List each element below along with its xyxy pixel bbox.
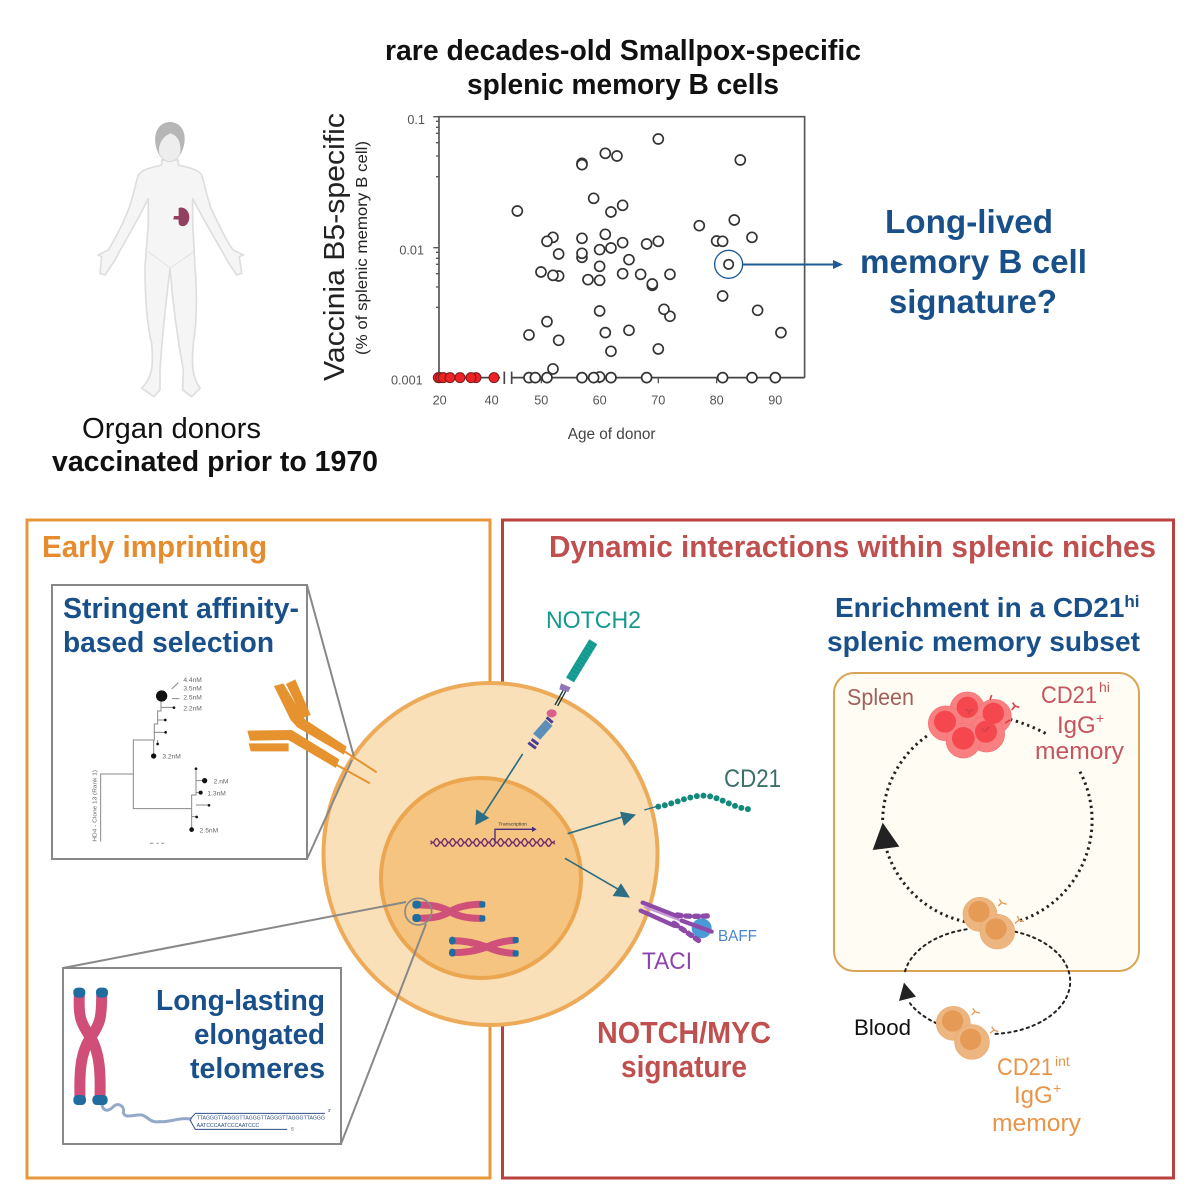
labels: spleen cycle xyxy=(847,679,1124,1137)
icon: NOTCH2 receptor, transcription and arrows: Transcription xyxy=(498,821,527,827)
phylogenetic tree xyxy=(93,677,228,843)
scatter chart: B5-specific cells vs age: 80 xyxy=(710,393,724,407)
heading: NOTCH/MYC signature xyxy=(597,1015,771,1084)
phylogenetic tree: 2.2nM xyxy=(183,706,202,713)
heading: dynamic interactions: Dynamic interactions within splenic niches xyxy=(549,529,1156,564)
callout: long-lived memory B cell signature: memory B cell xyxy=(860,243,1087,280)
text: organ donors caption xyxy=(52,413,378,478)
inset: affinity selection xyxy=(52,585,307,859)
labels: spleen cycle: IgG xyxy=(1014,1082,1053,1109)
scatter chart: B5-specific cells vs age: 0.001 xyxy=(391,373,423,387)
phylogenetic tree: 2.5nM xyxy=(183,694,202,701)
phylogenetic tree: HD4 - Clone 13 (Rank 1) xyxy=(93,770,99,842)
heading: enrichment in CD21hi subset: hi xyxy=(1124,592,1140,611)
scatter chart: B5-specific cells vs age: 60 xyxy=(593,393,607,407)
heading: enrichment in CD21hi subset xyxy=(827,592,1140,657)
cell: B cell with nucleus xyxy=(324,683,658,1025)
nucleus xyxy=(381,778,581,978)
icon: chromosome with telomere sequence: AATCCCAATCCCAATCCC xyxy=(197,1123,259,1129)
heading: enrichment in CD21hi subset: splenic memory subset xyxy=(827,626,1140,657)
callout: long-lived memory B cell signature xyxy=(860,203,1087,320)
labels: spleen cycle: + xyxy=(1096,710,1104,726)
icon: chromosome with telomere sequence xyxy=(73,988,331,1132)
text: organ donors caption: Organ donors xyxy=(82,413,261,445)
heading: NOTCH/MYC signature: NOTCH/MYC xyxy=(597,1015,771,1050)
labels: spleen cycle: memory xyxy=(1035,738,1124,765)
labels: spleen cycle: Spleen xyxy=(847,684,914,710)
phylogenetic tree: 1.3nM xyxy=(207,790,226,797)
callout: long-lived memory B cell signature: signature? xyxy=(889,283,1057,320)
y-axis title: Vaccinia B5-specific xyxy=(319,113,351,381)
phylogenetic tree: 3.2nM xyxy=(162,754,181,761)
title: smallpox-specific memory B cells: splenic memory B cells xyxy=(467,69,779,101)
panel: spleen compartment xyxy=(834,673,1139,971)
heading: long-lasting elongated telomeres: elongated xyxy=(194,1019,325,1051)
labels: receptors: TACI xyxy=(642,948,692,975)
phylogenetic tree: 2.5nM xyxy=(200,827,218,834)
dotted blood cycle xyxy=(905,929,1070,1034)
scatter chart: B5-specific cells vs age: 0.1 xyxy=(407,113,425,127)
icon: human organ donor figure xyxy=(98,122,243,397)
scatter chart: B5-specific cells vs age: 40 xyxy=(485,393,499,407)
panel: dynamic interactions xyxy=(502,520,1174,1178)
CD21int cells in spleen xyxy=(963,897,1015,949)
labels: spleen cycle: memory xyxy=(992,1110,1081,1137)
heading: long-lasting elongated telomeres: Long-lasting xyxy=(156,985,325,1017)
scatter chart: B5-specific cells vs age xyxy=(391,113,805,443)
arrow: NOTCH2 to DNA xyxy=(475,754,636,898)
scatter chart: B5-specific cells vs age: 50 xyxy=(534,393,548,407)
y-axis title xyxy=(319,113,371,381)
y-axis title: (% of splenic memory B cell) xyxy=(354,141,371,355)
TACI and BAFF xyxy=(692,918,712,938)
phylogenetic tree: 2.nM xyxy=(214,778,228,785)
labels: spleen cycle: hi xyxy=(1099,679,1110,695)
heading: early imprinting: Early imprinting xyxy=(42,529,267,564)
scatter chart: B5-specific cells vs age: 90 xyxy=(768,393,782,407)
scatter chart: B5-specific cells vs age: 0.01 xyxy=(399,243,424,257)
heading: long-lasting elongated telomeres: telomeres xyxy=(190,1053,325,1085)
inset: elongated telomeres xyxy=(63,968,341,1144)
NOTCH2 extracellular chain xyxy=(570,642,593,680)
heading: stringent affinity-based selection: Stringent affinity- xyxy=(63,593,299,625)
labels: spleen cycle: + xyxy=(1053,1080,1061,1096)
labels: receptors: BAFF xyxy=(718,928,757,945)
heading: enrichment in CD21hi subset: Enrichment in a CD21 xyxy=(835,592,1124,623)
chromosomes in nucleus xyxy=(420,904,515,953)
title: smallpox-specific memory B cells xyxy=(385,35,861,101)
DNA transcription xyxy=(431,829,555,846)
panel: early imprinting xyxy=(27,520,490,1178)
text: organ donors caption: vaccinated prior to 1970 xyxy=(52,446,378,478)
heading: stringent affinity-based selection: based selection xyxy=(63,627,274,659)
scatter chart: B5-specific cells vs age: 70 xyxy=(651,393,665,407)
labels: receptors xyxy=(546,607,781,975)
icon: chromosome with telomere sequence: TTAGGGTTAGGGTTAGGGTTAGGGTTAGGGTTAGGG xyxy=(197,1115,325,1121)
heading: long-lasting elongated telomeres xyxy=(156,985,325,1085)
labels: spleen cycle: CD21 xyxy=(997,1054,1053,1081)
scatter chart: B5-specific cells vs age: Age of donor xyxy=(568,426,656,443)
icon: antibody xyxy=(247,679,377,783)
CD21 chain xyxy=(658,796,750,809)
phylogenetic tree: 3.5nM xyxy=(183,686,202,693)
heading: NOTCH/MYC signature: signature xyxy=(621,1049,747,1084)
labels: receptors: NOTCH2 xyxy=(546,607,641,634)
scatter chart: B5-specific cells vs age: 20 xyxy=(433,393,447,407)
labels: spleen cycle: CD21 xyxy=(1041,682,1097,709)
diagram: recirculation cycle with cells xyxy=(873,692,1092,1059)
icon: NOTCH2 receptor, transcription and arrows xyxy=(405,642,750,957)
labels: receptors: CD21 xyxy=(724,765,781,793)
CD21int cells in blood xyxy=(936,1006,989,1059)
labels: spleen cycle: IgG xyxy=(1057,712,1096,739)
icon: chromosome with telomere sequence: 5' xyxy=(291,1127,295,1132)
dotted spleen cycle xyxy=(883,719,1092,922)
inset zoom lines xyxy=(63,585,426,1144)
callout: long-lived memory B cell signature: Long-lived xyxy=(885,203,1053,240)
arrow: highlighted cell to signature xyxy=(742,260,843,269)
icon: chromosome with telomere sequence: 3' xyxy=(328,1108,331,1113)
heading: stringent affinity-based selection xyxy=(63,593,299,659)
labels: spleen cycle: int xyxy=(1055,1053,1070,1069)
labels: spleen cycle: Blood xyxy=(854,1015,911,1040)
title: smallpox-specific memory B cells: rare decades-old Smallpox-specific xyxy=(385,35,861,67)
phylogenetic tree: 4.4nM xyxy=(183,677,202,684)
CD21hi cell cluster xyxy=(928,692,1011,758)
